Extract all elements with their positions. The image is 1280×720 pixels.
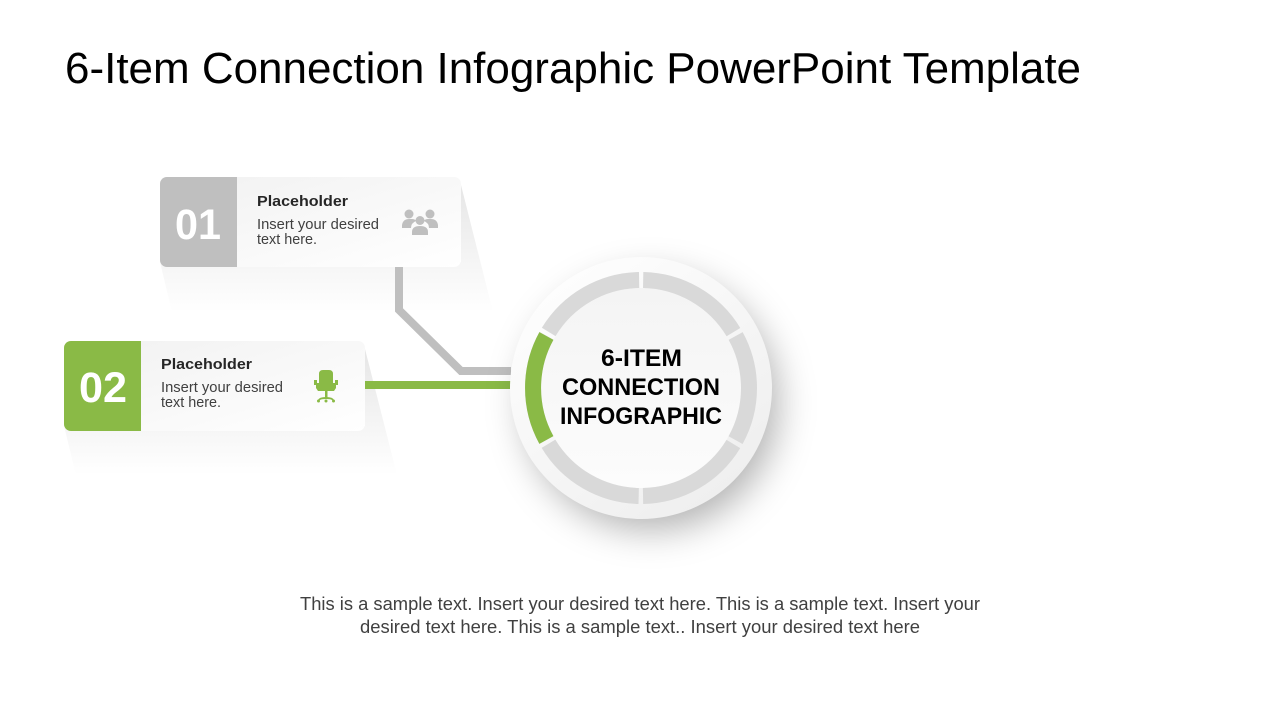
- body text 01: text here.: [257, 232, 317, 248]
- number badge 01: 01: [175, 201, 221, 249]
- body text 02: text here.: [161, 395, 221, 411]
- inner disc: [541, 288, 741, 488]
- number badge 02: [64, 341, 141, 431]
- card body 01: [160, 177, 461, 267]
- outer disc: [510, 257, 772, 519]
- footer text: desired text here. This is a sample text.. Insert your desired text here: [360, 617, 920, 637]
- panel: item 01: [160, 177, 493, 312]
- connector: item 02 to centre: [365, 381, 511, 389]
- number badge 02: 02: [79, 364, 127, 412]
- circle shadow: [524, 276, 778, 530]
- centre label: INFOGRAPHIC: [560, 403, 722, 430]
- heading 01: Placeholder: [257, 193, 348, 210]
- card shadow 01: [160, 185, 493, 312]
- icon: people: [402, 210, 438, 235]
- segmented ring: [533, 280, 749, 496]
- card shadow 02: [64, 349, 397, 475]
- title: 6-Item Connection Infographic PowerPoint Template: [65, 44, 1081, 93]
- centre label: 6-ITEM: [601, 345, 682, 372]
- body text 02: Insert your desired: [161, 380, 283, 396]
- connector: item 01 to centre: [399, 267, 511, 371]
- central circle: [510, 257, 778, 530]
- panel: item 02: [64, 341, 397, 475]
- footer text: This is a sample text. Insert your desired text here. This is a sample text. Insert your: [300, 594, 980, 614]
- heading 02: Placeholder: [161, 356, 252, 373]
- body text 01: Insert your desired: [257, 217, 379, 233]
- centre label: CONNECTION: [562, 374, 720, 401]
- number badge 01: [160, 177, 237, 267]
- active ring segment: [533, 336, 546, 440]
- card body 02: [64, 341, 365, 431]
- icon: office chair: [314, 370, 338, 402]
